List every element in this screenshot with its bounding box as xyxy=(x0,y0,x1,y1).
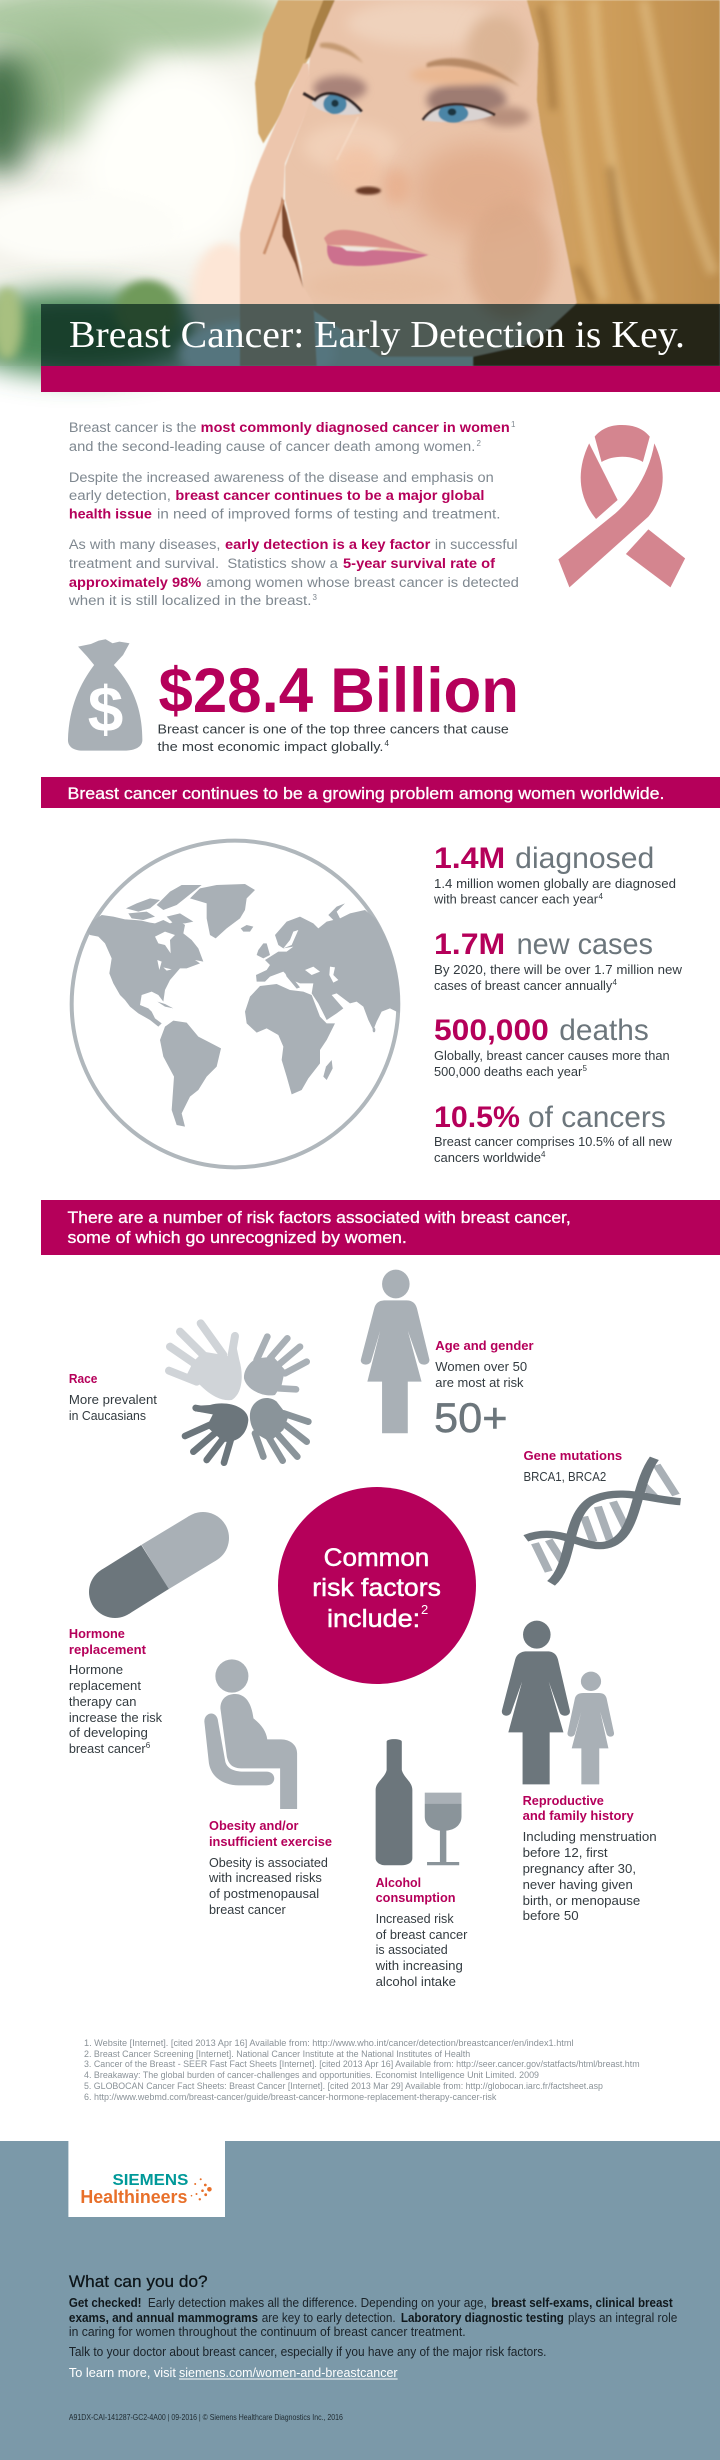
text: reproductive and family history: Reproductive xyxy=(523,1793,604,1808)
text: obesity: insufficient exercise xyxy=(209,1834,332,1849)
icon: four hands xyxy=(169,1323,308,1463)
text: reproductive and family history: Including menstruation xyxy=(523,1829,657,1844)
central circle: common risk factors xyxy=(278,1487,476,1684)
icon: woman xyxy=(361,1270,429,1433)
footer panel xyxy=(0,2141,720,2460)
text: age and gender xyxy=(434,1338,534,1441)
stat: 500,000 deaths xyxy=(434,1014,670,1079)
text: obesity: Obesity and/or xyxy=(209,1818,298,1833)
icon: DNA helix xyxy=(526,1458,681,1583)
text: obesity: of postmenopausal xyxy=(209,1886,319,1901)
icon: seated person xyxy=(204,1659,297,1809)
call to action text: Talk to your doctor about breast cancer, especially if you have any of the major risk factors. xyxy=(69,2344,547,2359)
text: reproductive and family history: birth, or menopause xyxy=(523,1893,640,1908)
eyes xyxy=(312,94,362,115)
text: reproductive and family history: and family history xyxy=(523,1808,634,1823)
central circle: common risk factors: 2 xyxy=(421,1602,428,1617)
icon: wine bottle and glass xyxy=(376,1739,461,1865)
references: 4. Breakaway: The global burden of cancer-challenges and opportunities. Economist Intelligence Unit Limited. 2009 xyxy=(84,2070,539,2080)
logo: Siemens Healthineers xyxy=(68,2141,225,2217)
call to action text: Laboratory diagnostic testing xyxy=(401,2310,564,2325)
intro text block: approximately 98% xyxy=(69,575,201,590)
banner: risk factors xyxy=(41,1200,720,1255)
stat: 1.7M new cases: 4 xyxy=(612,978,618,987)
icon: mother and child xyxy=(502,1621,614,1784)
text: obesity: with increased risks xyxy=(208,1870,322,1885)
call to action text: exams, and annual mammograms xyxy=(69,2310,258,2325)
intro text block: As with many diseases, xyxy=(69,537,220,552)
text: age and gender: Age and gender xyxy=(435,1338,534,1353)
central circle: common risk factors: risk factors xyxy=(312,1574,441,1602)
stat: 10.5% of cancers: 4 xyxy=(541,1150,546,1159)
stat: 1.4M diagnosed: 1.4M xyxy=(434,842,505,875)
central circle: common risk factors: include: xyxy=(327,1605,420,1633)
text: race xyxy=(69,1371,157,1423)
references xyxy=(84,2038,640,2102)
text: hormone replacement: replacement xyxy=(69,1642,147,1657)
text: reproductive and family history: pregnancy after 30, xyxy=(523,1861,636,1876)
intro text block: in need of improved forms of testing and treatment. xyxy=(157,506,500,522)
logo: Siemens Healthineers: SIEMENS xyxy=(112,2172,189,2189)
call to action text: in caring for women throughout the continuum of breast cancer treatment. xyxy=(69,2324,466,2339)
text: reproductive and family history: never having given xyxy=(523,1877,633,1892)
nose xyxy=(336,148,376,174)
document code line: A91DX-CAI-141287-GC2-4A00 | 09-2016 | © Siemens Healthcare Diagnostics Inc., 2016 xyxy=(69,2412,343,2422)
heading: what can you do: What can you do? xyxy=(69,2272,208,2291)
stat: 500,000 deaths: 500,000 deaths each year xyxy=(434,1064,583,1079)
text: obesity: breast cancer xyxy=(209,1902,286,1917)
text: alcohol: Increased risk xyxy=(376,1911,454,1926)
economic impact text xyxy=(158,722,509,754)
stat: 1.4M diagnosed: diagnosed xyxy=(515,842,654,875)
text: race: Race xyxy=(69,1371,97,1386)
icon: hormone pill xyxy=(89,1512,229,1618)
stat: 500,000 deaths: 500,000 xyxy=(434,1014,549,1047)
text: obesity: Obesity is associated xyxy=(209,1855,328,1870)
call to action text xyxy=(69,2295,677,2380)
economic impact text: the most economic impact globally. xyxy=(158,739,384,754)
intro text block: early detection is a key factor xyxy=(225,537,431,552)
stat: 10.5% of cancers: Breast cancer comprises 10.5% of all new xyxy=(434,1134,672,1149)
text: alcohol: of breast cancer xyxy=(376,1927,468,1942)
text: gene mutations xyxy=(524,1448,622,1484)
stat: 10.5% of cancers: cancers worldwide xyxy=(434,1150,541,1165)
intro text block: 2 xyxy=(476,439,482,448)
references: 3. Cancer of the Breast - SEER Fast Fact Sheets [Internet]. [cited 2013 Apr 16] Available from: http://seer.cancer.gov/statfacts/html/breast.htm xyxy=(84,2059,640,2069)
call to action text: siemens.com/women-and-breastcancer xyxy=(179,2365,398,2380)
text: alcohol xyxy=(375,1875,468,1989)
call to action text: plays an integral role xyxy=(568,2310,677,2325)
hair: right side xyxy=(473,0,720,366)
hand xyxy=(240,63,317,366)
stat: 1.4M diagnosed: 1.4 million women globally are diagnosed xyxy=(434,876,676,891)
icon: pink ribbon xyxy=(558,425,685,587)
intro text block: when it is still localized in the breast. xyxy=(68,593,311,608)
logo: Siemens Healthineers: Healthineers xyxy=(80,2187,187,2207)
brows and eyelids xyxy=(313,76,367,101)
stat: 1.7M new cases: 1.7M xyxy=(434,928,505,961)
text: hormone replacement: breast cancer xyxy=(69,1741,146,1756)
text: hormone replacement: Hormone xyxy=(69,1626,125,1641)
text: hormone replacement: of developing xyxy=(69,1725,148,1740)
stat: 500,000 deaths: 5 xyxy=(582,1064,588,1073)
text: hormone replacement: replacement xyxy=(69,1678,141,1693)
stat: 1.7M new cases: new cases xyxy=(517,928,653,961)
text: hormone replacement: Hormone xyxy=(69,1662,123,1677)
text: hormone replacement: increase the risk xyxy=(69,1710,163,1725)
intro text block: early detection, xyxy=(69,488,171,503)
call to action text: To learn more, visit xyxy=(69,2365,176,2380)
call to action text: Early detection makes all the difference. Depending on your age, xyxy=(148,2295,487,2310)
stat: 1.4M diagnosed: 4 xyxy=(598,892,604,901)
stat: 10.5% of cancers xyxy=(434,1101,672,1165)
intro text block: in successful xyxy=(435,537,518,552)
text: age and gender: are most at risk xyxy=(435,1375,524,1390)
banner: growing problem xyxy=(41,777,720,808)
banner: growing problem: Breast cancer continues to be a growing problem among women worldwide. xyxy=(68,785,664,803)
intro text block: 5-year survival rate of xyxy=(343,556,496,571)
economic impact text: 4 xyxy=(384,739,390,748)
intro text block: breast cancer continues to be a major global xyxy=(175,488,484,503)
references: 1. Website [Internet]. [cited 2013 Apr 16] Available from: http://www.who.int/cancer/detection/breastcancer/en/index1.html xyxy=(84,2038,574,2048)
intro text block: 1 xyxy=(511,420,516,429)
intro text block xyxy=(68,420,519,608)
stat: 10.5% of cancers: 10.5% xyxy=(434,1101,520,1134)
text: reproductive and family history: before 50 xyxy=(523,1908,579,1923)
intro text block: treatment and survival. Statistics show a xyxy=(69,556,338,571)
intro text block: most commonly diagnosed cancer in women xyxy=(201,420,510,435)
banner: risk factors: There are a number of risk factors associated with breast cancer, xyxy=(68,1209,571,1227)
text: hormone replacement: 6 xyxy=(146,1741,151,1750)
intro text block: Breast cancer is the xyxy=(69,420,197,435)
text: hormone replacement: therapy can xyxy=(69,1694,136,1709)
call to action text: Get checked! xyxy=(69,2295,142,2310)
intro text block: health issue xyxy=(69,506,152,522)
text: hormone replacement xyxy=(69,1626,163,1756)
stat: 500,000 deaths: Globally, breast cancer causes more than xyxy=(434,1048,670,1063)
text: race: in Caucasians xyxy=(69,1408,146,1423)
references: 5. GLOBOCAN Cancer Fact Sheets: Breast Cancer [Internet]. [cited 2013 Mar 29] Available from: http://globocan.iarc.fr/factsheet.asp xyxy=(84,2081,603,2091)
text: age and gender: Women over 50 xyxy=(435,1359,527,1374)
text: alcohol: consumption xyxy=(376,1890,456,1905)
stat: 500,000 deaths: deaths xyxy=(559,1014,649,1047)
lips xyxy=(324,230,430,266)
call to action text: breast self-exams, clinical breast xyxy=(491,2295,673,2310)
text: alcohol: Alcohol xyxy=(376,1875,421,1890)
central circle: common risk factors: Common xyxy=(324,1544,429,1572)
hero photo background xyxy=(0,0,720,387)
stat: 1.4M diagnosed: with breast cancer each year xyxy=(433,892,599,906)
skin xyxy=(285,0,577,357)
title: Breast Cancer: Early Detection is Key. xyxy=(69,314,685,356)
stats column xyxy=(433,842,683,1165)
stat: 10.5% of cancers: of cancers xyxy=(528,1101,666,1134)
title band xyxy=(41,304,720,366)
call to action text: are key to early detection. xyxy=(262,2310,396,2325)
stat: 1.7M new cases: cases of breast cancer annually xyxy=(434,978,613,993)
headline: $28.4 Billion: $28.4 Billion xyxy=(158,656,519,726)
references: 2. Breast Cancer Screening [Internet]. National Cancer Institute at the National Institutes of Health xyxy=(84,2049,470,2059)
text: alcohol: with increasing xyxy=(375,1958,463,1973)
text: race: More prevalent xyxy=(69,1392,157,1407)
banner: risk factors: some of which go unrecognized by women. xyxy=(68,1229,407,1247)
economic impact text: Breast cancer is one of the top three cancers that cause xyxy=(158,722,509,736)
text: age and gender: 50+ xyxy=(434,1394,508,1441)
icon: money bag xyxy=(68,639,142,751)
magenta bar under title xyxy=(41,366,720,392)
intro text block: among women whose breast cancer is detected xyxy=(206,575,519,590)
hair: left side xyxy=(255,0,335,143)
stat: 1.7M new cases: By 2020, there will be over 1.7 million new xyxy=(434,962,683,977)
text: gene mutations: Gene mutations xyxy=(524,1448,622,1463)
intro text block: Despite the increased awareness of the disease and emphasis on xyxy=(69,470,494,485)
text: alcohol: is associated xyxy=(376,1942,448,1957)
text: gene mutations: BRCA1, BRCA2 xyxy=(524,1469,606,1484)
icon: money bag: $ xyxy=(88,673,123,745)
references: 6. http://www.webmd.com/breast-cancer/guide/breast-cancer-hormone-replacement-therapy-cancer-risk xyxy=(84,2092,497,2102)
text: reproductive and family history xyxy=(523,1793,657,1923)
text: alcohol: alcohol intake xyxy=(376,1974,456,1989)
icon: world globe xyxy=(72,841,400,1167)
text: reproductive and family history: before 12, first xyxy=(523,1845,608,1860)
text: obesity xyxy=(208,1818,332,1917)
hero photo: woman's face xyxy=(240,0,720,366)
intro text block: and the second-leading cause of cancer death among women. xyxy=(69,439,475,454)
stat: 1.4M diagnosed xyxy=(433,842,676,906)
stat: 1.7M new cases xyxy=(434,928,683,993)
intro text block: 3 xyxy=(312,593,318,602)
